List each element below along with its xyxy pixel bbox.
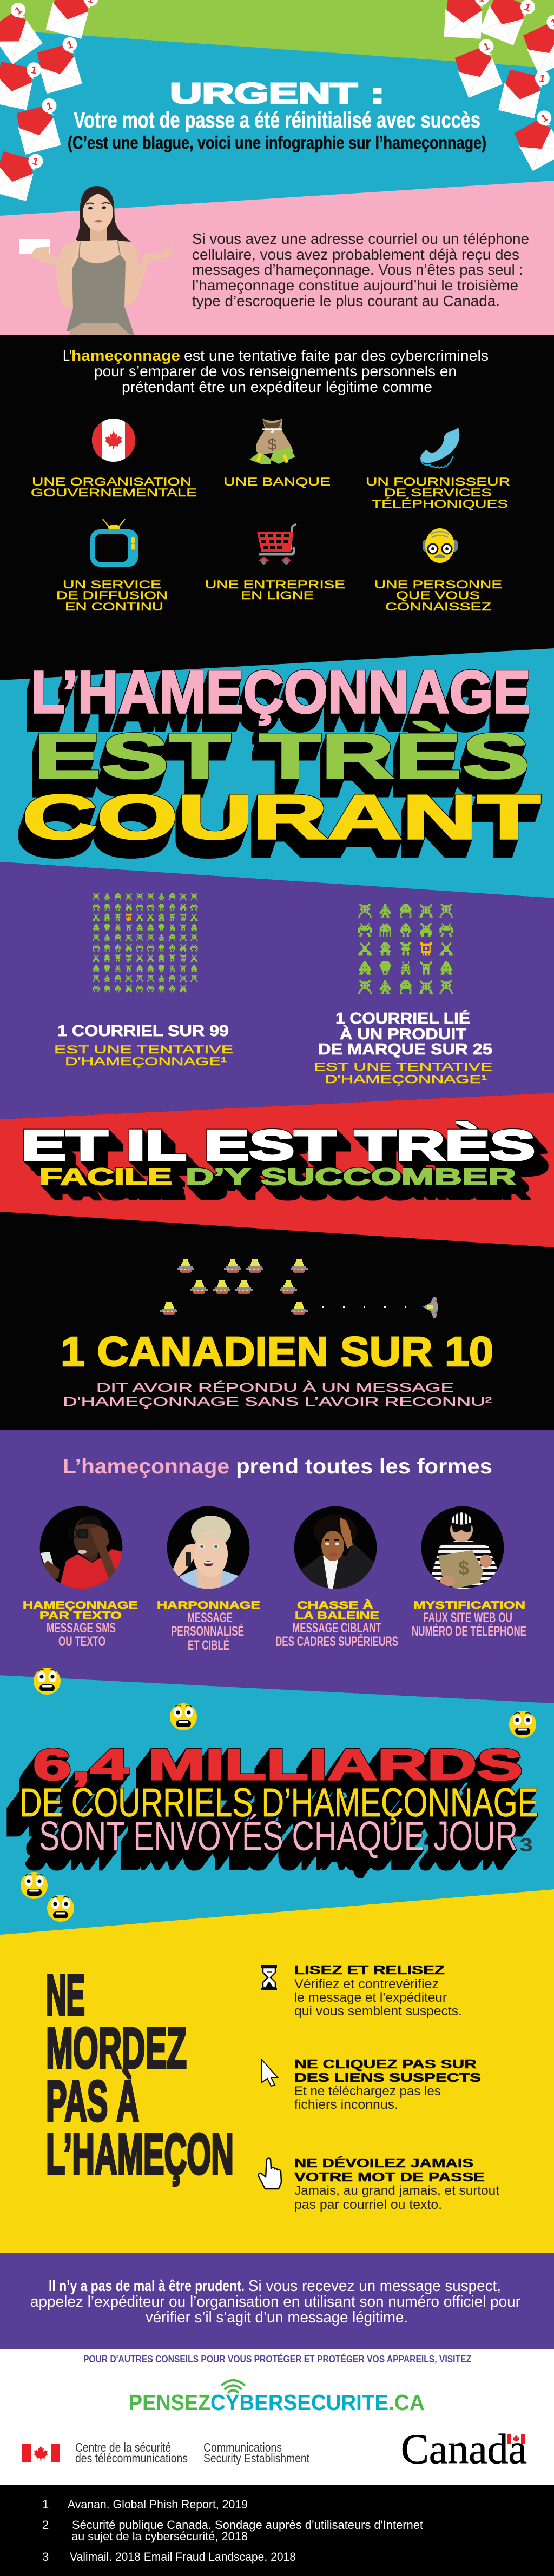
stat description: D'HAMEÇONNAGE SANS L’AVOIR RECONNU²: [63, 1395, 492, 1409]
tip: ne dévoilez jamais: NE DÉVOILEZ JAMAIS: [294, 2155, 473, 2170]
reference 1: Avanan. Global Phish Report, 2019: [68, 2498, 248, 2511]
label: spoofing: [412, 1600, 526, 1639]
envelopes right: [444, 0, 554, 171]
stat: 1 in 25: EST UNE TENTATIVE: [314, 1061, 492, 1073]
label: banque: UNE BANQUE: [223, 476, 331, 488]
logo: pensezcybersecurite: PENSEZ: [129, 2390, 210, 2415]
panel: one canadian in ten: [0, 1212, 554, 1430]
label: spoofing: MYSTIFICATION: [413, 1600, 525, 1611]
label: entreprise: UNE ENTREPRISE: [205, 579, 345, 591]
icon: pointing hand: [259, 2159, 281, 2189]
label: organisation: UNE ORGANISATION: [32, 476, 192, 488]
logo: pensezcybersecurite: [129, 2380, 425, 2415]
definition text: pour s’emparer de vos renseignements personnels en: [94, 363, 457, 380]
logo text: english: Security Establishment: [203, 2451, 310, 2465]
stat: 6,4 milliards: 6,4 MILLIARDS: [33, 1741, 523, 1789]
label: spear phishing: ET CIBLÉ: [188, 1637, 229, 1653]
heading: est très: EST TRÈS: [34, 721, 530, 792]
label: organisation: GOUVERNEMENTALE: [31, 487, 197, 499]
reference 3: Valimail. 2018 Email Fraud Landscape, 2018: [70, 2550, 296, 2564]
tip: lisez et relisez: [294, 1963, 462, 2019]
emoji: scared faces: [21, 1668, 536, 1922]
label: fournisseur: UN FOURNISSEUR: [366, 476, 510, 488]
game graphic: alien ships: [160, 1259, 406, 1315]
photo: man with phone: [40, 1506, 124, 1590]
photo: shocked older woman: [167, 1506, 250, 1591]
label: fournisseur: [366, 476, 510, 510]
heading: et il est très: ET IL EST TRÈS: [21, 1121, 535, 1169]
stat: 1 in 25: 1 COURRIEL LIÉ: [335, 1009, 470, 1027]
reference 2: Sécurité publique Canada. Sondage auprès d’utilisateurs d'Internet: [72, 2518, 423, 2532]
definition text: prétendant être un expéditeur légitime comme: [122, 379, 432, 395]
panel: easy to fall for: [0, 1093, 554, 1247]
advice text: Il n’y a pas de mal à être prudent.: [49, 2278, 245, 2295]
label: smishing: PAR TEXTO: [39, 1610, 122, 1622]
stat: 1 in 25: [314, 1009, 492, 1086]
logo text: french: [75, 2440, 188, 2465]
label: whaling: LA BALEINE: [295, 1610, 379, 1622]
intro paragraph: Si vous avez une adresse courriel ou un téléphone: [192, 230, 529, 247]
tip: ne dévoilez jamais: pas par courriel ou texto.: [294, 2197, 442, 2212]
stat: 1 canadien sur 10: 1 CANADIEN SUR 10: [61, 1329, 493, 1375]
label: fournisseur: DE SERVICES: [384, 487, 492, 499]
intro paragraph: l’hameçonnage constitue aujourd’hui le troisième: [192, 277, 518, 294]
stat: 1 in 99: D'HAMEÇONNAGE¹: [65, 1055, 227, 1068]
heading: ne mordez pas à l'hameçon: PAS À: [46, 2069, 139, 2133]
panel: references: [0, 2485, 554, 2576]
label: spear phishing: MESSAGE: [187, 1610, 233, 1625]
heading: courant: COURANT: [22, 782, 540, 852]
icon: money bag: [249, 419, 295, 464]
icon: tv: [90, 519, 138, 567]
panel: very common: [0, 648, 554, 898]
tip: lisez et relisez: LISEZ ET RELISEZ: [294, 1963, 445, 1977]
intro paragraph: type d’escroquerie le plus courant au Canada.: [192, 293, 500, 309]
label: personne: CONNAISSEZ: [385, 601, 491, 613]
label: personne: QUE VOUS: [396, 589, 480, 602]
tip: ne cliquez pas: fichiers inconnus.: [294, 2097, 398, 2112]
advice text: Si vous recevez un message suspect,: [248, 2278, 501, 2295]
heading: d'y succomber: D’Y SUCCOMBER: [186, 1164, 516, 1190]
photo: masked burglar with sack: $: [458, 1557, 469, 1579]
call to action: POUR D'AUTRES CONSEILS POUR VOUS PROTÉGER ET PROTÉGER VOS APPAREILS, VISITEZ: [83, 2353, 471, 2365]
icon: hourglass: [261, 1965, 277, 1990]
advice text: vérifier s’il s’agit d’un message légitime.: [146, 2309, 408, 2326]
photo: woman with hand on forehead: [294, 1506, 377, 1591]
heading: ne mordez pas à l'hameçon: [46, 1963, 234, 2186]
icon: old man face: [423, 528, 458, 563]
title: urgent: URGENT :: [170, 77, 385, 110]
label: spear phishing: PERSONNALISÉ: [171, 1623, 244, 1639]
reference 1: 1: [42, 2498, 49, 2511]
advice text: appelez l’expéditeur ou l’organisation en utilisant son numéro officiel pour: [30, 2293, 520, 2311]
reference 2: [42, 2518, 423, 2543]
label: spear phishing: HARPONNAGE: [157, 1600, 260, 1611]
label: entreprise: [205, 579, 345, 602]
label: personne: [374, 579, 502, 613]
reference 3: 3: [42, 2550, 49, 2564]
label: diffusion: DE DIFFUSION: [56, 589, 168, 602]
stat: 1 in 99: 1 COURRIEL SUR 99: [57, 1023, 229, 1040]
definition text: hameçonnage: [71, 347, 180, 364]
label: whaling: MESSAGE CIBLANT: [292, 1621, 381, 1636]
definition text: [63, 347, 489, 395]
panel: logos: [0, 2349, 554, 2485]
heading: all forms: prend toutes les formes: [236, 1455, 492, 1478]
label: personne: UNE PERSONNE: [374, 579, 502, 591]
stat: 1 in 25: À UN PRODUIT: [340, 1025, 466, 1043]
definition text: L’: [63, 347, 72, 364]
game graphic: player ship: [423, 1297, 438, 1318]
invader grid 1 in 99: [93, 894, 198, 992]
label: whaling: DES CADRES SUPÉRIEURS: [275, 1634, 398, 1649]
tip: ne cliquez pas: NE CLIQUEZ PAS SUR: [294, 2057, 477, 2071]
stat: 1 in 25: D'HAMEÇONNAGE¹: [325, 1073, 487, 1086]
logo: cse flag: [22, 2444, 60, 2462]
label: smishing: HAMEÇONNAGE: [23, 1600, 138, 1611]
logo text: english: [203, 2440, 310, 2465]
label: diffusion: [56, 579, 168, 613]
heading: facile: FACILE: [39, 1164, 172, 1190]
logo: pensezcybersecurite: CYBERSECURITE: [210, 2390, 388, 2415]
intro paragraph: messages d’hameçonnage. Vous n’êtes pas seul :: [192, 261, 523, 278]
tip: lisez et relisez: le message et l’expéditeur: [294, 1990, 447, 2005]
footnote mark 3: 3: [519, 1835, 533, 1856]
panel: statistics: [0, 862, 554, 1119]
icon: canadian flag: [92, 419, 135, 462]
heading: hameçonnage: L’HAMEÇONNAGE: [31, 659, 531, 726]
tip: ne cliquez pas: DES LIENS SUSPECTS: [294, 2070, 481, 2084]
tip: ne cliquez pas: [294, 2057, 481, 2112]
icon: money bag: $: [268, 436, 277, 454]
panel: forms of phishing: [0, 1430, 554, 1703]
logo text: french: des télécommunications: [75, 2451, 188, 2465]
label: diffusion: UN SERVICE: [63, 579, 161, 591]
logo text: french: Centre de la sécurité: [75, 2440, 171, 2454]
heading: ne mordez pas à l'hameçon: MORDEZ: [46, 2016, 187, 2080]
label: entreprise: EN LIGNE: [241, 589, 314, 602]
label: whaling: CHASSE À: [297, 1599, 373, 1611]
panel: definition: [31, 350, 510, 611]
intro paragraph: [192, 230, 529, 309]
icon: money bag: $: [271, 427, 274, 434]
advice text: [30, 2278, 520, 2326]
icon: cursor arrow: [261, 2059, 278, 2086]
label: smishing: [23, 1600, 138, 1649]
icon: telephone: [420, 428, 459, 468]
tip: ne dévoilez jamais: Jamais, au grand jamais, et surtout: [294, 2183, 499, 2198]
label: spear phishing: [157, 1600, 260, 1653]
logo: canada wordmark: Canada: [401, 2425, 527, 2472]
panel: hero urgent: [0, 0, 554, 335]
label: spoofing: FAUX SITE WEB OU: [423, 1610, 512, 1625]
panel: do not bite: [0, 1889, 554, 2253]
reference 2: 2: [42, 2518, 49, 2532]
tip: lisez et relisez: qui vous semblent suspects.: [294, 2004, 462, 2019]
heading: ne mordez pas à l'hameçon: NE: [46, 1963, 85, 2027]
label: smishing: OU TEXTO: [58, 1634, 105, 1649]
stat description: [63, 1380, 492, 1409]
panel: be careful: [0, 2253, 554, 2349]
heading: ne mordez pas à l'hameçon: L’HAMEÇON: [46, 2122, 234, 2186]
stat description: DIT AVOIR RÉPONDU À UN MESSAGE: [96, 1380, 454, 1395]
label: diffusion: EN CONTINU: [65, 601, 163, 613]
reference 2: au sujet de la cybersécurité, 2018: [71, 2529, 248, 2543]
envelopes left: [0, 0, 100, 203]
panel: 6.4 billion: [0, 1668, 554, 1935]
label: organisation: [31, 476, 197, 499]
stat: 1 in 99: [54, 1023, 233, 1068]
heading: all forms: [63, 1455, 492, 1478]
heading: all forms: L’hameçonnage: [63, 1455, 229, 1478]
tip: lisez et relisez: Vérifiez et contrevérifiez: [294, 1977, 439, 1991]
label: whaling: [275, 1599, 398, 1649]
woman shrugging with phone: [19, 186, 179, 335]
photo: masked burglar with sack: [421, 1506, 504, 1591]
logo: pensezcybersecurite: .CA: [388, 2390, 425, 2415]
tip: ne dévoilez jamais: [294, 2155, 499, 2212]
label: fournisseur: TÉLÉPHONIQUES: [372, 498, 508, 510]
stat: 1 in 99: EST UNE TENTATIVE: [54, 1044, 233, 1056]
tip: ne cliquez pas: Et ne téléchargez pas les: [294, 2084, 441, 2099]
invader grid 1 in 25: [358, 905, 453, 993]
stat: 1 in 25: DE MARQUE SUR 25: [318, 1041, 492, 1058]
logo text: english: Communications: [203, 2440, 282, 2454]
tip: ne dévoilez jamais: VOTRE MOT DE PASSE: [294, 2170, 485, 2184]
icon: shopping cart: [257, 525, 296, 565]
intro paragraph: cellulaire, vous avez probablement déjà reçu des: [192, 246, 519, 263]
label: smishing: MESSAGE SMS: [47, 1621, 116, 1636]
definition text: est une tentative faite par des cybercriminels: [184, 347, 489, 364]
